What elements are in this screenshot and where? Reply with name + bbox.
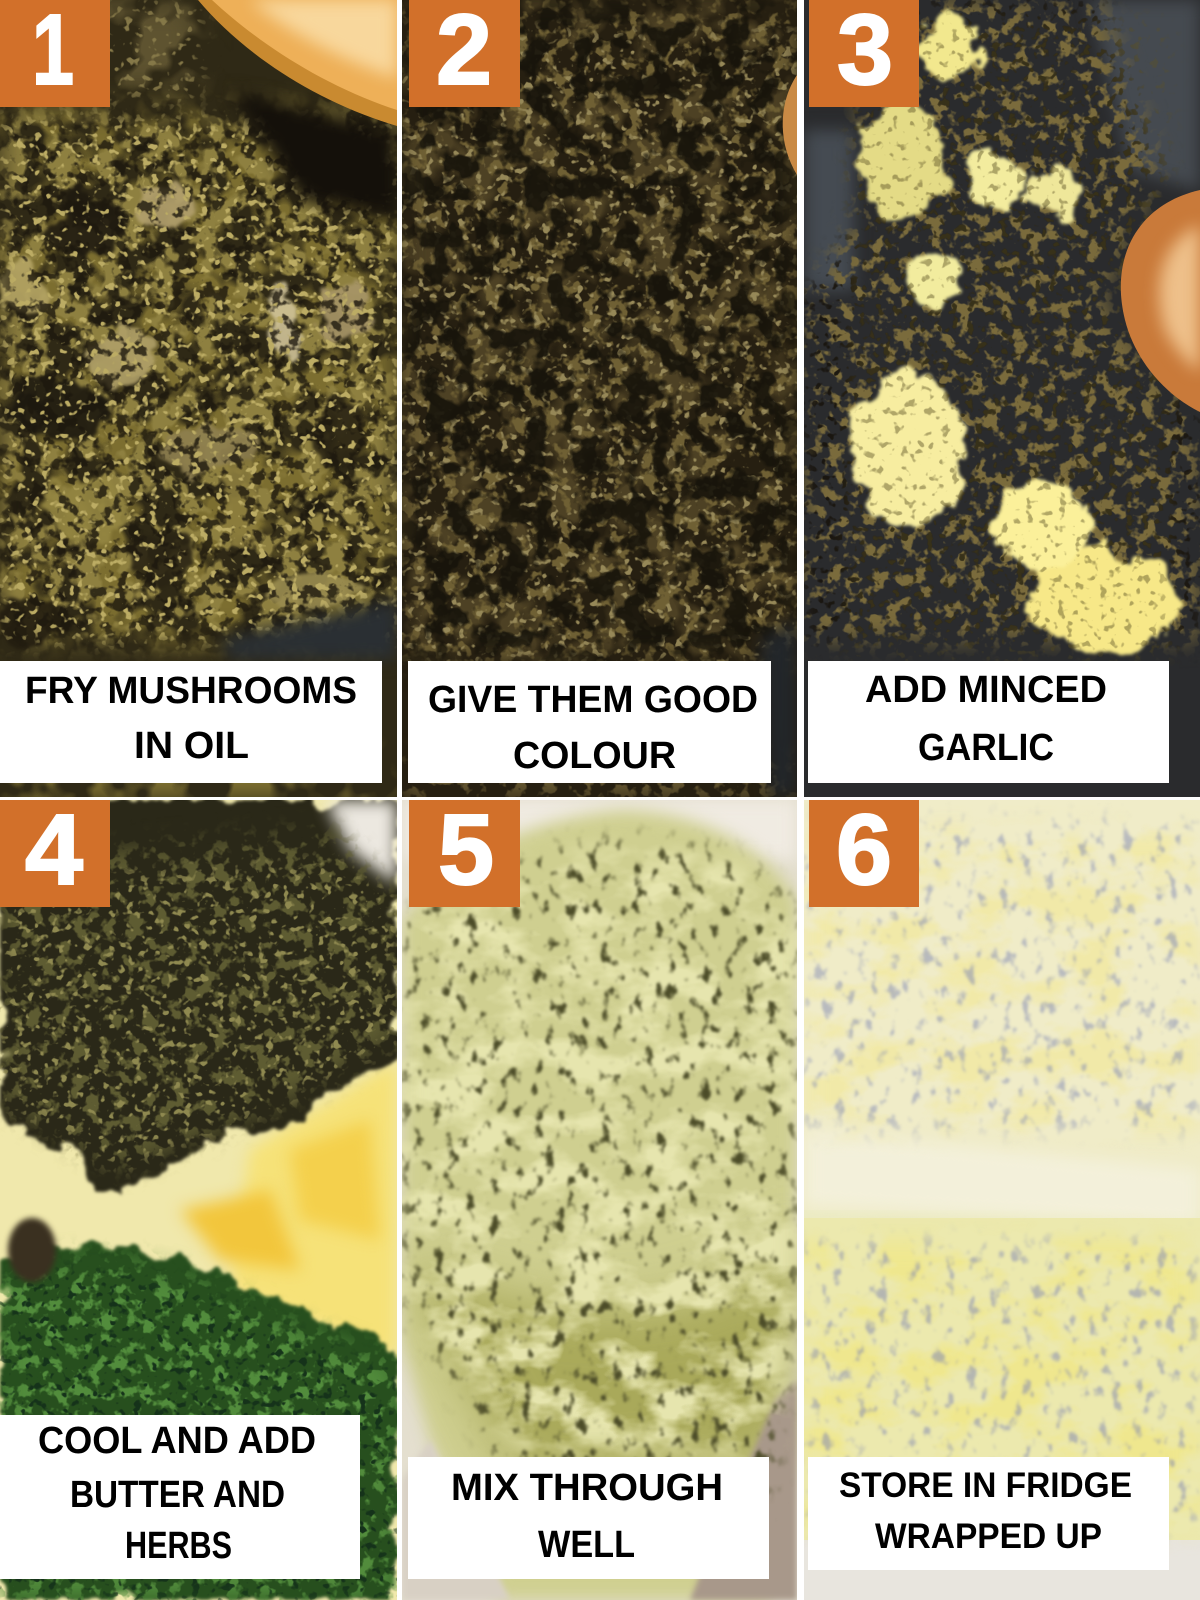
caption: fry mushrooms in oil	[0, 661, 382, 783]
caption: mix through well: WELL	[538, 1524, 635, 1566]
caption: cool and add butter and herbs: HERBS	[125, 1525, 232, 1567]
caption: give them good colour: COLOUR	[513, 735, 676, 777]
panel: step 1 fry mushrooms	[0, 0, 397, 797]
caption: store in fridge wrapped up	[808, 1457, 1169, 1570]
caption: fry mushrooms in oil: FRY MUSHROOMS	[25, 670, 357, 712]
wooden spoon	[1121, 190, 1200, 412]
number badge 5: 5	[438, 794, 494, 906]
number badge 4: 4	[25, 794, 83, 906]
caption: mix through well	[408, 1457, 769, 1579]
number badge 5	[409, 794, 520, 907]
photo: mixed mushroom butter	[402, 800, 797, 1600]
light and dark mushroom pieces	[0, 188, 369, 642]
caption: add minced garlic: GARLIC	[918, 727, 1054, 769]
panel: step 3 add garlic	[804, 0, 1200, 797]
caption: give them good colour	[408, 661, 771, 783]
caption: store in fridge wrapped up: WRAPPED UP	[875, 1517, 1102, 1556]
minced garlic mounds	[852, 18, 1181, 650]
photo: browned mushrooms	[402, 0, 797, 797]
photo: mushrooms with minced garlic and spoon	[804, 0, 1200, 797]
white bowl corner	[325, 800, 397, 885]
number badge 2	[409, 0, 520, 107]
number badge 3	[809, 0, 919, 107]
photo: mushrooms, butter and herbs in bowl	[0, 800, 397, 1600]
mushroom mound	[0, 800, 397, 1195]
caption: cool and add butter and herbs: COOL AND ADD	[38, 1420, 316, 1462]
caption: mix through well: MIX THROUGH	[451, 1467, 723, 1509]
dark pan corner	[760, 620, 797, 797]
spoon edge	[783, 75, 797, 175]
panel: step 4 butter and herbs	[0, 794, 397, 1600]
number badge 6: 6	[836, 794, 892, 906]
chopped parsley	[0, 1244, 397, 1600]
panel: step 2 colour mushrooms	[402, 0, 797, 797]
caption: add minced garlic	[808, 661, 1169, 783]
panel: step 5 mix through	[402, 794, 797, 1600]
number badge 1	[0, 0, 110, 107]
caption: add minced garlic: ADD MINCED	[865, 669, 1107, 711]
butter	[230, 1060, 397, 1360]
caption: store in fridge wrapped up: STORE IN FRIDGE	[839, 1466, 1132, 1505]
taupe surface	[690, 1380, 797, 1600]
caption: fry mushrooms in oil: IN OIL	[134, 725, 249, 767]
number badge 4	[0, 794, 110, 907]
panel: step 6 store in fridge	[804, 794, 1200, 1600]
dark pan shadow	[220, 600, 397, 660]
caption: cool and add butter and herbs	[0, 1415, 360, 1579]
caption: cool and add butter and herbs: BUTTER AND	[70, 1474, 285, 1516]
photo: frying mushrooms with wooden spoon	[0, 0, 397, 797]
caption: give them good colour: GIVE THEM GOOD	[428, 679, 758, 721]
photo: wrapped butter log	[804, 800, 1200, 1600]
number badge 6	[809, 794, 919, 907]
wooden spoon	[198, 0, 397, 126]
